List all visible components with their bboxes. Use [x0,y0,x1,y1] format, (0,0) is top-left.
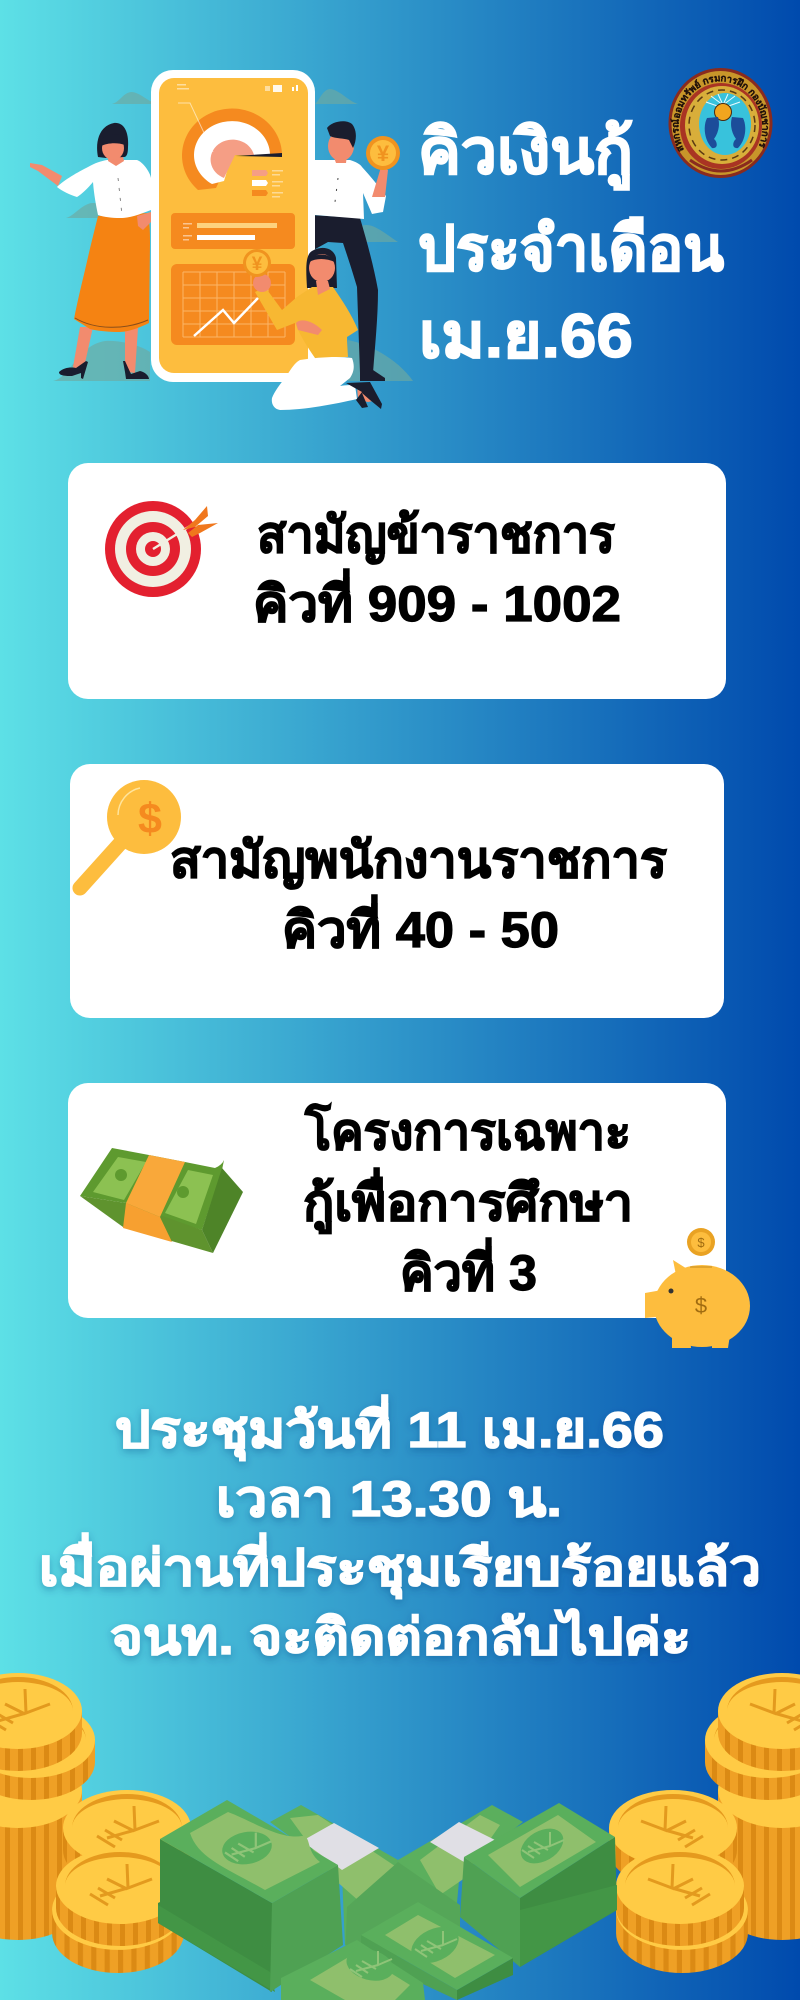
right block [460,1803,617,1967]
background clouds and ground [53,89,413,381]
banknotes pile [158,1800,617,2000]
card text: คิวที่ 3 [400,1238,537,1301]
card text: โครงการเฉพาะ [304,1102,631,1160]
icon: piggy bank: $ [697,1235,705,1250]
icon: piggy bank [645,1228,750,1348]
coin: yen held: ¥ [252,254,263,275]
card text: กู้เพื่อการศึกษา [303,1168,633,1234]
panel: special project [68,1083,750,1348]
icon: money bundle [80,1148,243,1253]
logo: cooperative seal [668,68,772,178]
icon: magnifier coin: $ [138,795,162,843]
back right bills [398,1805,523,1925]
front bill lower [281,1940,425,2000]
card text: คิวที่ 40 - 50 [282,895,559,958]
coin: yen: ¥ [377,141,390,166]
man standing [315,121,400,219]
woman seated [243,248,382,410]
panel: government employees [70,764,724,1018]
title: คิวเงินกู้ [418,118,633,190]
meeting notice text: จนท. จะติดต่อกลับไปค่ะ [110,1608,691,1665]
phone panel: line chart [171,264,295,345]
card text: สามัญข้าราชการ [257,507,615,564]
title: เม.ย.66 [419,302,633,371]
panel: regular civil servants [68,463,726,699]
center fill [345,1862,460,1960]
left block [158,1800,343,1992]
card text [170,832,667,958]
meeting notice text: ประชุมวันที่ 11 เม.ย.66 [115,1395,664,1461]
card text [253,507,621,632]
man pants [310,215,378,373]
icon: piggy bank: $ [695,1293,707,1318]
card text: คิวที่ 909 - 1002 [253,569,621,632]
card text: สามัญพนักงานราชการ [170,832,667,889]
coins: right stacks [609,1673,800,1973]
title: ประจำเดือน [418,215,724,284]
man shoe [360,370,385,381]
meeting notice text: เวลา 13.30 น. [216,1471,562,1527]
phone panel: bars [171,213,295,249]
front bill upper [361,1902,513,2000]
icon: target [105,501,218,597]
back left bills [270,1805,398,1945]
coin: yen held [243,249,271,277]
card text [303,1102,633,1301]
status bar [177,84,298,92]
phone [151,70,315,382]
icon: magnifier coin [80,780,181,888]
illustration: team with phone [30,70,413,410]
meeting notice text: เมื่อผ่านที่ประชุมเรียบร้อยแล้ว [39,1533,761,1599]
title [418,118,724,371]
gauge chart [178,103,282,190]
coins: left stacks [0,1673,191,1973]
woman standing [30,123,151,379]
gauge legend [252,170,283,198]
meeting notice text [39,1395,761,1665]
